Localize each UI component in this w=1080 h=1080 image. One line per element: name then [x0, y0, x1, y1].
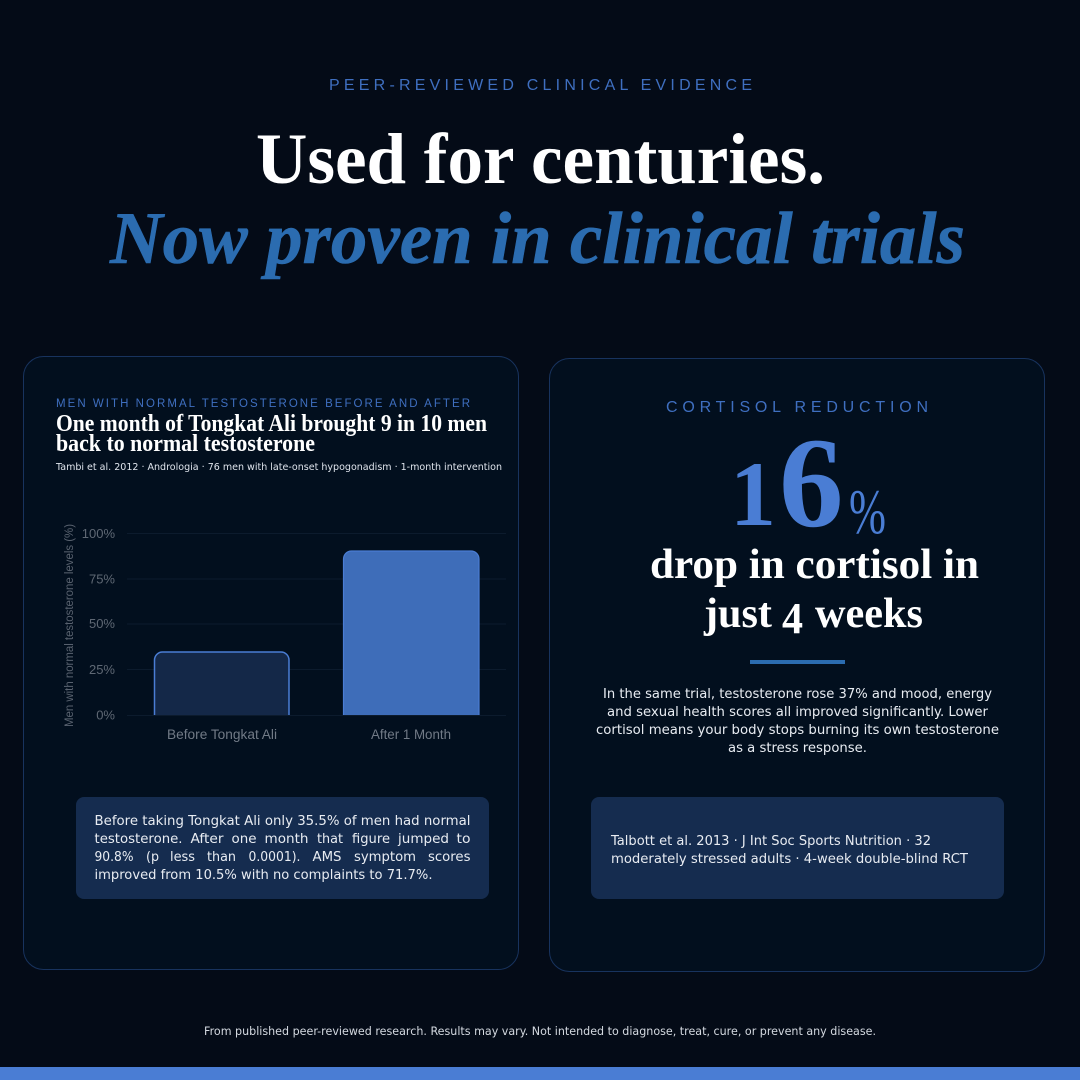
eyebrow: peer-reviewed clinical evidence: PEER-REVIEWED CLINICAL EVIDENCE: [329, 77, 752, 94]
body text: as a stress response.: [728, 741, 867, 756]
panel: cortisol reduction: [550, 358, 1044, 972]
callout: results summary: jumped: [397, 832, 449, 847]
body text: and sexual health scores all improved significantly. Lower: [607, 705, 989, 720]
y axis tick labels: 0%: [96, 708, 115, 722]
callout: results summary: Before taking Tongkat Ali only 35.5% of men had normal: [94, 814, 470, 829]
big stat: 16%: 1: [730, 443, 776, 545]
x label: after: After 1 Month: [371, 727, 451, 742]
callout: results summary: (p: [146, 850, 159, 865]
stat description: 4: [782, 594, 803, 643]
body text: In the same trial, testosterone rose 37% and mood, energy: [603, 687, 992, 702]
callout: results summary: than: [207, 850, 236, 865]
callout: study citation: moderately stressed adults · 4-week double-blind RCT: [611, 852, 969, 867]
y axis tick labels: [82, 526, 115, 722]
callout: results summary: scores: [428, 850, 471, 865]
callout: results summary: to: [456, 832, 470, 847]
x label: before: Before Tongkat Ali: [167, 727, 277, 742]
title: [109, 119, 965, 280]
panel heading: back to normal testosterone: [56, 430, 315, 457]
y axis tick labels: 25%: [89, 662, 115, 677]
big stat: 16%: [730, 411, 886, 554]
callout: results summary: [76, 797, 489, 899]
callout: results summary: 90.8%: [94, 850, 134, 865]
panel eyebrow: CORTISOL REDUCTION: [666, 399, 928, 416]
body text: [596, 687, 999, 756]
panel: testosterone study: [24, 356, 518, 970]
panel background: [24, 356, 518, 970]
panel background: [550, 358, 1044, 972]
bar chart: [64, 524, 506, 742]
stat description: weeks: [815, 591, 923, 637]
footer disclaimer: From published peer-reviewed research. Results may vary. Not intended to diagnose, treat, cure, or prevent any disease.: [204, 1024, 876, 1038]
stat description: drop in cortisol in: [650, 542, 979, 588]
callout: study citation: [591, 797, 1004, 899]
stat description: [650, 542, 979, 643]
callout: results summary: figure: [352, 832, 390, 847]
big stat: 16%: %: [849, 476, 886, 547]
y axis tick labels: 50%: [89, 616, 115, 631]
callout: results summary: After: [190, 832, 224, 847]
study citation: Tambi et al. 2012 · Andrologia · 76 men with late-onset hypogonadism · 1-month intervention: [55, 462, 502, 473]
bottom accent bar: [0, 1067, 1080, 1080]
bar: before Tongkat Ali: [154, 652, 289, 715]
callout: results summary: month: [264, 832, 308, 847]
callout: results summary: one: [232, 832, 256, 847]
callout: study citation: Talbott et al. 2013 · J Int Soc Sports Nutrition · 32: [610, 834, 931, 849]
panel eyebrow: MEN WITH NORMAL TESTOSTERONE BEFORE AND AFTER: [56, 398, 470, 410]
title line 2: Now proven in clinical trials: [109, 198, 965, 280]
callout: results summary: 0.0001).: [248, 850, 300, 865]
y axis tick labels: 100%: [82, 526, 115, 541]
panel heading: One month of Tongkat Ali brought 9 in 10 men: [56, 410, 487, 437]
stat description: just: [703, 591, 772, 637]
y axis title: Men with normal testosterone levels (%): [64, 524, 76, 727]
accent rule: [750, 660, 845, 664]
body text: cortisol means your body stops burning its own testosterone: [596, 723, 999, 738]
title line 1: Used for centuries.: [256, 119, 825, 199]
callout: results summary: less: [170, 850, 195, 865]
callout: results summary: AMS: [312, 850, 342, 865]
big stat: 16%: 6: [779, 411, 844, 554]
callout: results summary: testosterone.: [94, 832, 182, 847]
callout: results summary: symptom: [354, 850, 416, 865]
y axis tick labels: 75%: [89, 572, 115, 586]
bar: after 1 month: [344, 551, 479, 715]
panel heading: [56, 410, 487, 457]
callout: results summary: improved from 10.5% with no complaints to 71.7%.: [94, 868, 432, 883]
callout: results summary: that: [317, 832, 343, 847]
